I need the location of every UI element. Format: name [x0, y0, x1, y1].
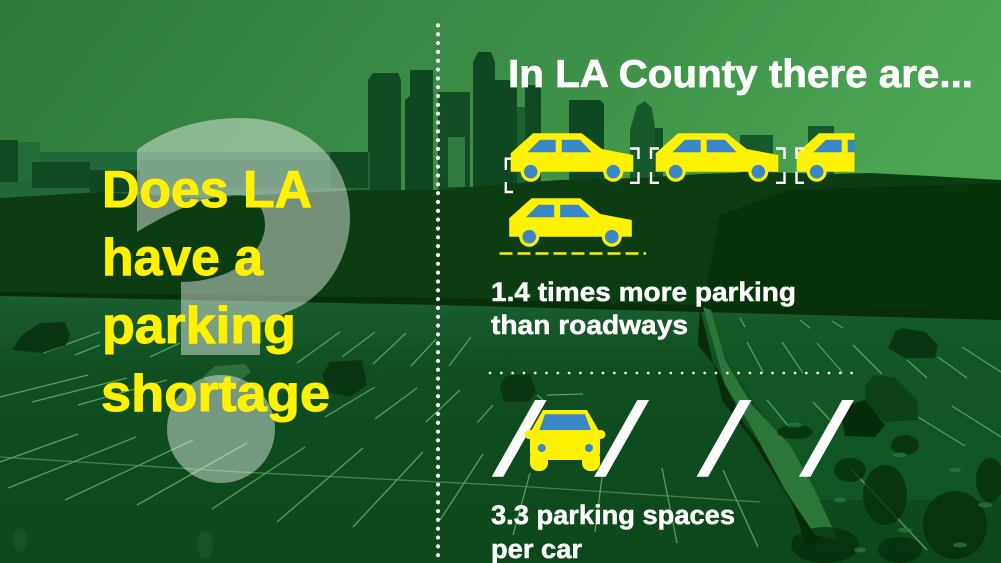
text: 3.3 parking spaces per car: 3.3 parking spaces [491, 500, 735, 530]
hedge [698, 308, 820, 548]
icon: cars in parking brackets [504, 133, 854, 194]
heading: Does LA have a parking shortage [101, 161, 330, 423]
text: 1.4 times more parking than roadways: 1.4 times more parking [491, 277, 796, 307]
text: 1.4 times more parking than roadways: than roadways [491, 310, 688, 340]
sky [0, 0, 1001, 320]
parking lines [0, 318, 1001, 550]
heading: In LA County there are: In LA County there are... [508, 53, 973, 96]
heading: Does LA have a parking shortage: have a [102, 229, 264, 287]
heading: Does LA have a parking shortage: shortage [101, 365, 330, 423]
icon: car on road [500, 198, 646, 254]
heading: Does LA have a parking shortage: Does LA [102, 161, 312, 219]
text: 3.3 parking spaces per car [491, 500, 735, 563]
icon: large translucent question mark [137, 118, 350, 483]
divider: vertical dotted line [436, 25, 440, 563]
parking lot [0, 294, 1001, 563]
icon: parking space lines [492, 400, 854, 477]
icon: yellow car front view [524, 410, 606, 471]
foliage [777, 425, 1001, 563]
distant city left [0, 140, 370, 200]
divider: horizontal dotted line [490, 372, 853, 374]
parked cars [12, 322, 938, 437]
downtown skyline [368, 52, 834, 200]
heading: Does LA have a parking shortage: parking [102, 297, 296, 355]
panel: parking vs roadways [491, 133, 854, 340]
panel: spaces per car [491, 400, 854, 563]
forest hills [0, 172, 1001, 322]
text: 1.4 times more parking than roadways [491, 277, 796, 340]
